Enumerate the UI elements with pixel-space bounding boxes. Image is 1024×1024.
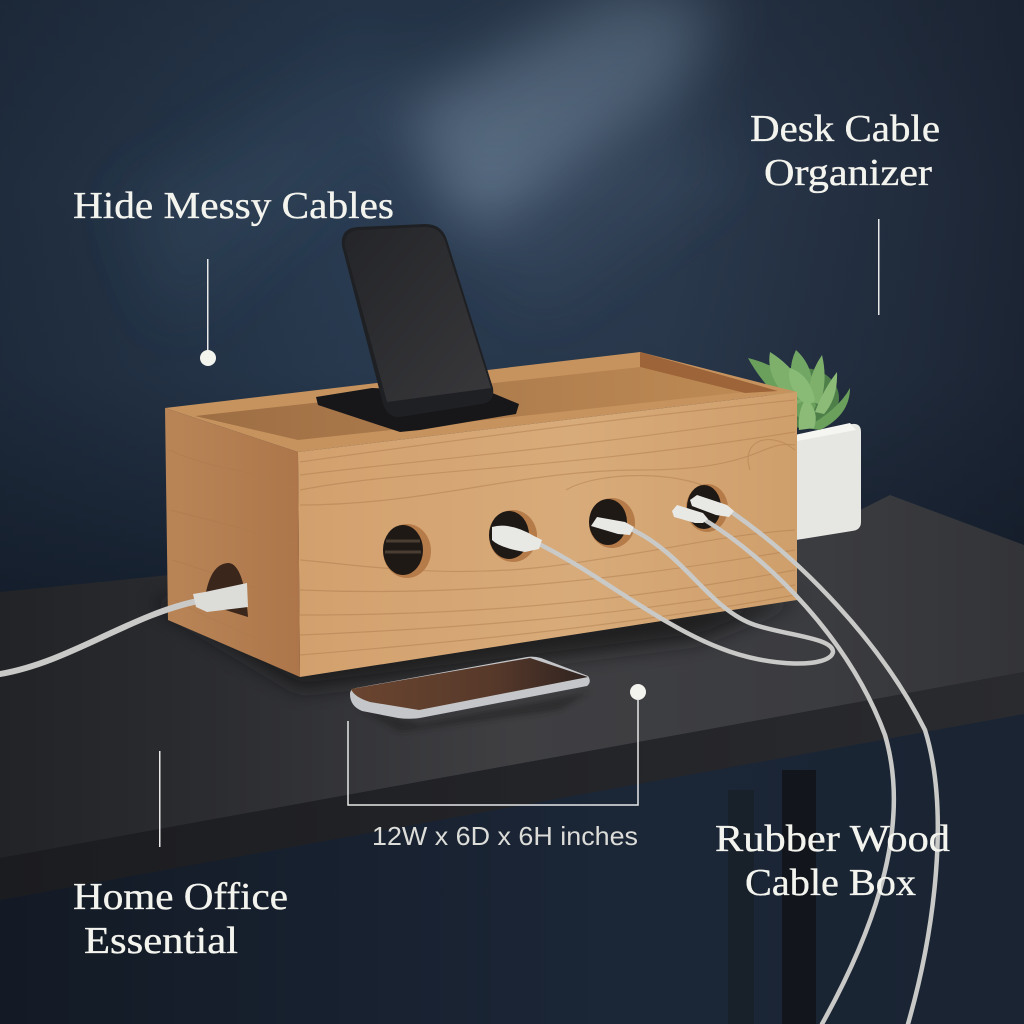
annotation: Rubber Wood Cable Box [715,818,950,904]
annotation: dimensions [348,684,646,851]
cable plugs [193,495,734,612]
background wall with diagonal light [0,0,1024,620]
annotation: dimensions: 12W x 6D x 6H inches [372,821,638,851]
desk and legs [0,495,1024,1024]
inner wall of rim [640,352,778,393]
annotation: Desk Cable Organizer: Desk Cable [750,108,940,150]
annotation: Home Office Essential [73,751,288,962]
wood grain [170,400,795,655]
annotation: Hide Messy Cables [73,185,394,366]
box front [298,392,797,677]
annotation: Home Office Essential: Essential [84,920,238,962]
annotation: Rubber Wood Cable Box: Rubber Wood [715,818,950,860]
annotation: Desk Cable Organizer [750,108,940,315]
wooden cable box [165,352,797,677]
annotation: Home Office Essential: Home Office [73,876,288,918]
box side [165,408,300,677]
annotation: Hide Messy Cables: Hide Messy Cables [73,185,394,227]
cable holes [206,484,728,617]
recessed lid [195,367,745,440]
cables [0,495,938,1024]
annotation: Desk Cable Organizer: Organizer [764,152,932,194]
smartphone on desk [350,657,590,732]
box top rim [165,352,797,452]
annotation: Rubber Wood Cable Box: Cable Box [745,862,916,904]
wireless charging stand [316,224,519,432]
succulent plant in white pot [748,350,861,541]
